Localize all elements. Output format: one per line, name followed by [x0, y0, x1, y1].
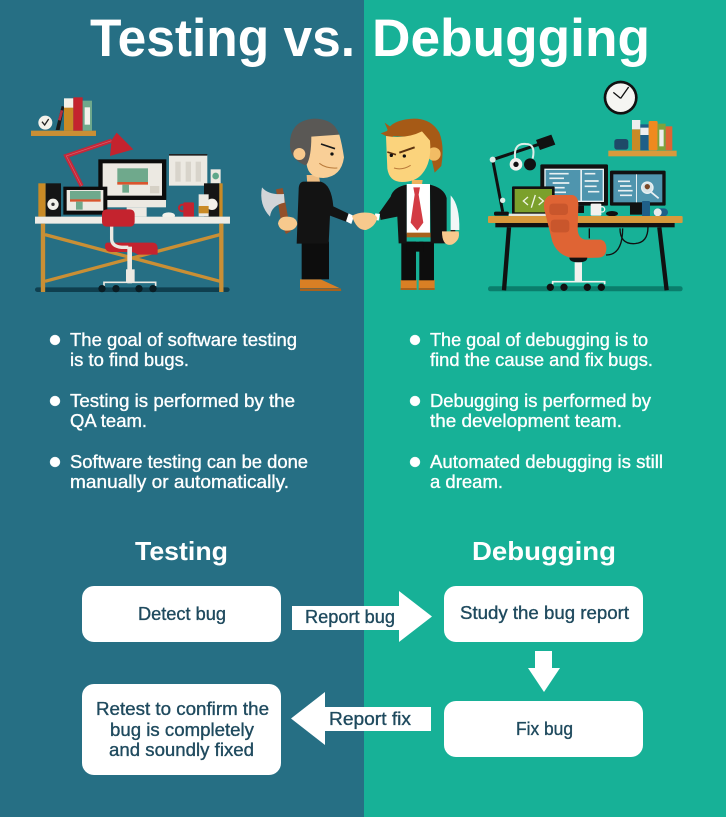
text block: debugging points: find the cause and fix bugs. — [430, 350, 653, 370]
arrow: report fix — [291, 692, 431, 745]
title: Debugging — [372, 9, 650, 68]
box: detect bug: Detect bug — [138, 604, 226, 624]
text block: testing points — [50, 330, 308, 492]
heading: debugging: Debugging — [472, 536, 616, 566]
text block: debugging points: The goal of debugging is to — [430, 330, 648, 350]
box: detect bug — [82, 586, 281, 642]
text block: testing points: QA team. — [70, 411, 147, 431]
panel: testing background — [0, 0, 364, 817]
illustration: handshake characters — [261, 119, 459, 291]
box: retest: Retest to confirm the — [96, 699, 269, 719]
panel: debugging background — [364, 0, 726, 817]
text block: debugging points: Debugging is performed by — [430, 391, 651, 411]
character: developer — [352, 119, 459, 290]
box: retest: bug is completely — [110, 720, 254, 740]
arrow: report bug: Report bug — [305, 607, 395, 627]
arrow: down to fix bug — [528, 651, 560, 692]
box: retest — [82, 684, 281, 775]
text block: debugging points: Automated debugging is still — [430, 452, 663, 472]
character: tester — [290, 119, 354, 291]
box: retest: and soundly fixed — [109, 740, 254, 760]
arrow: report fix: Report fix — [329, 709, 411, 729]
title — [90, 9, 650, 68]
box: study the bug report — [444, 586, 643, 642]
heading: testing: Testing — [135, 536, 228, 566]
text block: testing points: Software testing can be done — [70, 452, 308, 472]
illustration: debugging desk — [488, 81, 683, 291]
text block: debugging points — [410, 330, 663, 492]
text block: debugging points: the development team. — [430, 411, 622, 431]
box: fix bug: Fix bug — [516, 719, 573, 739]
box: study the bug report: Study the bug report — [460, 603, 629, 623]
text block: testing points: The goal of software testing — [70, 330, 297, 350]
arrow: report bug — [292, 591, 432, 642]
text block: testing points: is to find bugs. — [70, 350, 189, 370]
text block: testing points: manually or automatically. — [70, 472, 289, 492]
illustration: testing desk — [31, 97, 230, 292]
icon: axe — [261, 187, 297, 234]
box: fix bug — [444, 701, 643, 757]
icon: wall clock — [604, 81, 638, 115]
title: Testing vs. — [90, 9, 355, 68]
text block: testing points: Testing is performed by the — [70, 391, 295, 411]
text block: debugging points: a dream. — [430, 472, 503, 492]
